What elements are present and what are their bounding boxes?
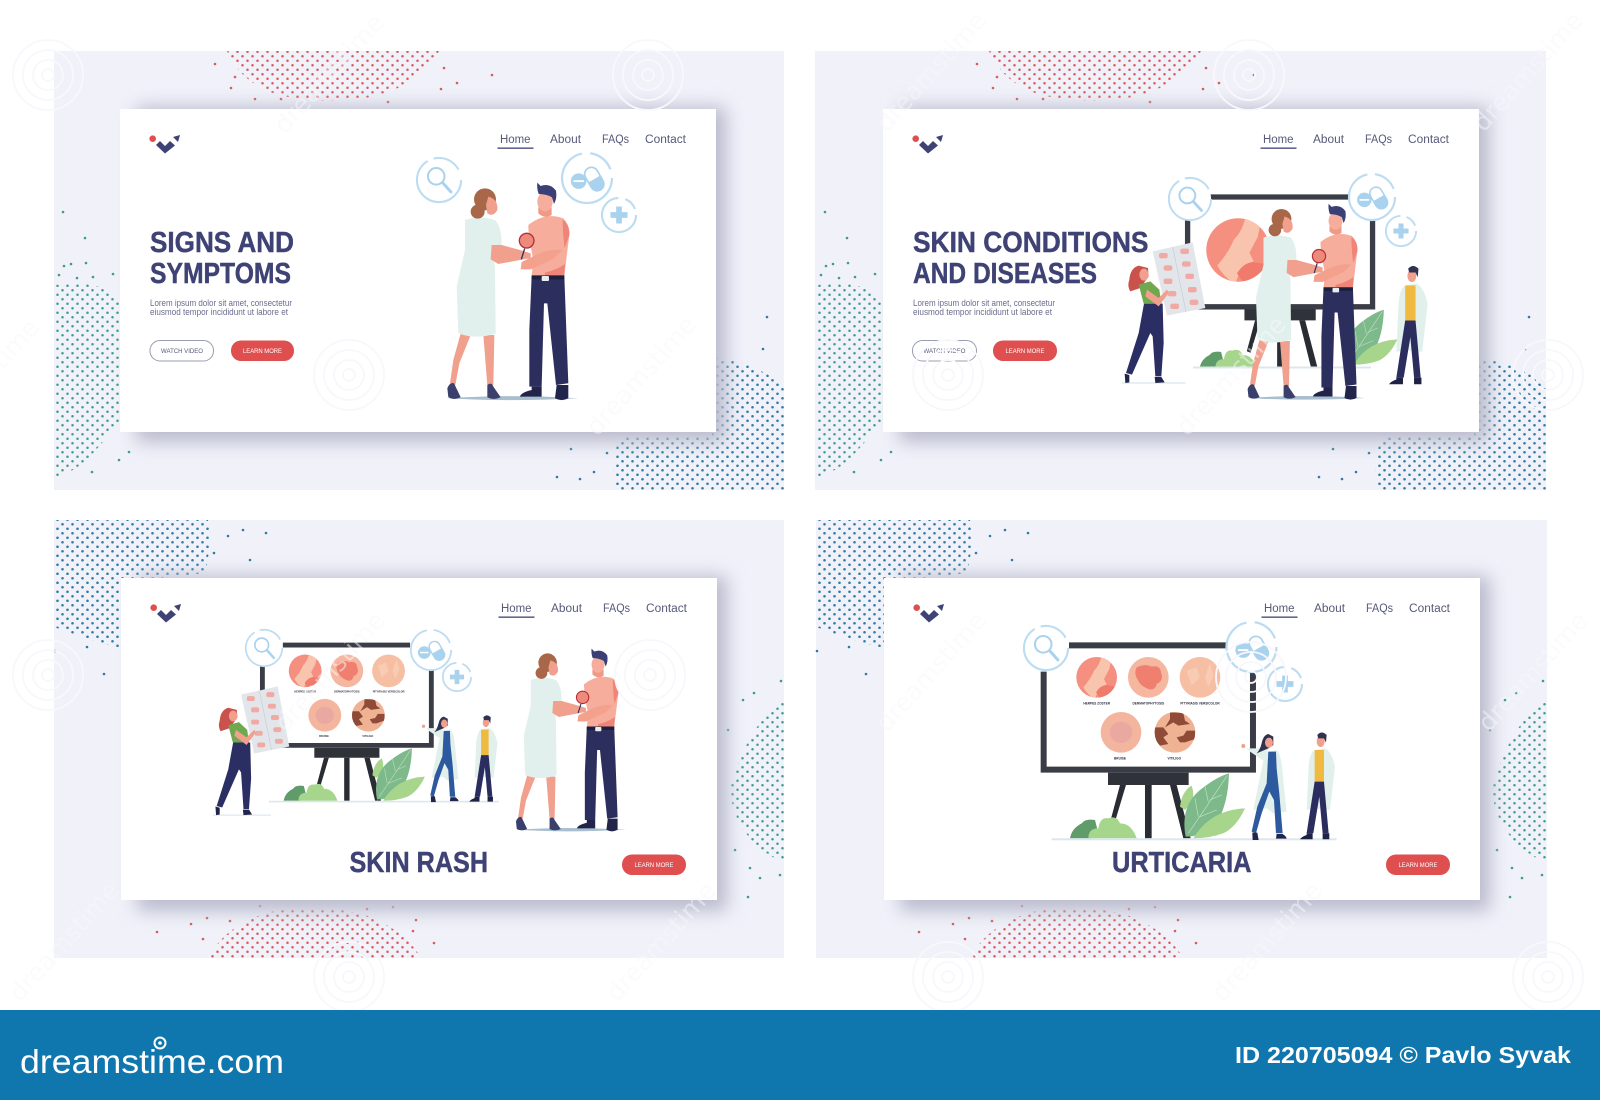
body text <box>150 298 292 317</box>
navigation: Home <box>1264 603 1294 615</box>
skin: herpes zoster <box>289 653 322 694</box>
plant: leaves <box>1342 310 1397 365</box>
skin: vitiligo: VITILIGO <box>1168 756 1182 760</box>
button: watch video <box>912 340 976 361</box>
button: learn more <box>622 854 686 875</box>
illustration: doctor examining patient <box>1247 204 1366 400</box>
body text: eiusmod tempor incididunt ut labore et <box>150 307 289 317</box>
navigation <box>498 134 687 149</box>
footer logo: dreamstime.com <box>20 1043 284 1080</box>
watermark text: dreamstime <box>870 606 992 737</box>
title <box>913 227 1148 290</box>
watermark text: dreamstime <box>1472 606 1594 737</box>
button: watch video: WATCH VIDEO <box>924 349 966 355</box>
navigation: Contact <box>1409 603 1451 615</box>
title: URTICARIA <box>1112 847 1252 879</box>
skin: pityriasis versicolor <box>1180 657 1220 705</box>
landing page card <box>120 109 716 432</box>
landing page card <box>884 578 1480 900</box>
character: woman with blister pack <box>1122 242 1205 384</box>
skin: pityriasis versicolor: PITYRIASIS VERSICOLOR <box>373 690 405 694</box>
icon: plus <box>602 198 636 232</box>
button: learn more: LEARN MORE <box>634 863 674 869</box>
character: male doctor <box>1389 266 1428 384</box>
card shadow <box>137 576 727 911</box>
navigation: FAQs <box>1366 603 1393 615</box>
navigation: FAQs <box>602 134 629 146</box>
title: AND DISEASES <box>913 258 1097 290</box>
icon: magnifier <box>1024 626 1068 670</box>
panel: signs and symptoms <box>54 51 784 490</box>
skin: bruise: BRUISE <box>1114 756 1126 760</box>
decorative dot clusters <box>816 520 1546 958</box>
poster with skin conditions and staff <box>1041 642 1337 840</box>
button: watch video <box>150 340 214 361</box>
navigation: FAQs <box>603 603 630 615</box>
icon: pills <box>562 153 612 203</box>
skin: pityriasis versicolor: PITYRIASIS VERSICOLOR <box>1180 701 1220 705</box>
title: SYMPTOMS <box>150 258 291 290</box>
character: female doctor <box>422 717 458 802</box>
body text <box>913 298 1055 317</box>
navigation: About <box>1314 603 1346 615</box>
skin: dermatophytosis <box>1128 657 1169 705</box>
icon: magnifier <box>246 630 282 666</box>
plant: bush <box>1200 350 1257 368</box>
card shadow <box>136 107 726 442</box>
illustration: poster with board <box>1185 194 1375 367</box>
skin: dermatophytosis: DERMATOPHYTOSIS <box>1133 701 1164 705</box>
navigation: Home <box>500 134 530 146</box>
skin: bruise <box>1101 712 1141 760</box>
title: SIGNS AND <box>150 227 294 259</box>
plant: leaves <box>1180 773 1245 838</box>
ground line <box>1193 366 1371 368</box>
skin: herpes zoster: HERPES ZOSTER <box>1083 701 1111 705</box>
icon: pills <box>1227 622 1276 672</box>
navigation: Contact <box>646 603 688 615</box>
panel: skin conditions and diseases <box>815 51 1546 490</box>
navigation: About <box>1313 134 1345 146</box>
logo <box>150 604 181 622</box>
watermark text: dreamstime <box>3 876 125 1007</box>
character: female doctor <box>1241 734 1287 840</box>
skin: herpes zoster: HERPES ZOSTER <box>294 690 316 694</box>
logo <box>912 135 943 154</box>
skin: dermatophytosis <box>330 654 363 694</box>
button: watch video: WATCH VIDEO <box>161 349 203 355</box>
watermark text: dreamstime <box>1467 6 1589 137</box>
body text: Lorem ipsum dolor sit amet, consectetur <box>913 298 1055 308</box>
navigation: About <box>550 134 582 146</box>
card shadow <box>900 576 1490 911</box>
watermark text: dreamstime <box>269 606 391 737</box>
landing page card <box>121 578 717 900</box>
watermark text: dreamstime <box>580 310 702 441</box>
icon: plus <box>443 663 471 691</box>
skin: vitiligo <box>1154 712 1195 760</box>
panel: skin rash <box>54 520 784 958</box>
navigation: Home <box>501 603 532 615</box>
skin: bruise: BRUISE <box>319 734 329 738</box>
decorative dot clusters <box>816 51 1546 490</box>
navigation: About <box>551 603 583 615</box>
icon: magnifier <box>417 158 461 202</box>
icon: plus <box>1268 667 1302 701</box>
skin: vitiligo <box>352 699 385 738</box>
poster skin circle <box>1206 216 1270 284</box>
watermark text: dreamstime <box>1206 876 1328 1007</box>
title <box>150 227 294 290</box>
button: learn more: LEARN MORE <box>243 349 282 355</box>
skin: herpes zoster <box>1076 656 1117 705</box>
ground line <box>1052 838 1337 840</box>
card shadow <box>899 107 1489 442</box>
button: learn more: LEARN MORE <box>1398 863 1438 869</box>
illustration: doctor examining patient <box>447 183 578 400</box>
watermark text: dreamstime <box>600 876 722 1007</box>
title: SKIN RASH <box>350 847 488 879</box>
navigation <box>1260 134 1450 149</box>
poster with skin conditions and staff <box>260 643 499 802</box>
landing page card <box>883 109 1479 432</box>
plant: bush <box>1070 817 1137 838</box>
skin: dermatophytosis: DERMATOPHYTOSIS <box>334 690 360 694</box>
skin: vitiligo: VITILIGO <box>362 734 373 738</box>
plant: leaves <box>372 748 425 801</box>
character: male doctor <box>1300 732 1335 839</box>
logo <box>149 135 180 154</box>
navigation <box>498 603 688 618</box>
image id and credit: ID 220705094 © Pavlo Syvak <box>1235 1042 1571 1068</box>
watermark text: dreamstime <box>268 8 390 139</box>
button: learn more: LEARN MORE <box>1006 349 1044 355</box>
body text: eiusmod tempor incididunt ut labore et <box>913 307 1053 317</box>
icon: plus <box>1386 216 1416 246</box>
icon: pills <box>411 630 451 670</box>
icon: pills <box>1349 174 1395 220</box>
watermark text: dreamstime <box>1170 310 1292 441</box>
navigation: Contact <box>1408 134 1450 146</box>
decorative dot clusters <box>54 520 784 958</box>
navigation <box>1262 603 1451 618</box>
navigation: Home <box>1263 134 1294 146</box>
character: male doctor <box>469 715 498 802</box>
body text: Lorem ipsum dolor sit amet, consectetur <box>150 298 292 308</box>
button: learn more <box>1386 854 1450 875</box>
button: learn more <box>993 340 1057 361</box>
logo <box>913 604 944 622</box>
illustration: doctor examining patient <box>515 649 626 831</box>
plant: bush <box>284 784 337 801</box>
footer bar <box>0 1010 1600 1100</box>
decorative dot clusters <box>54 51 784 490</box>
title: SKIN CONDITIONS <box>913 227 1148 259</box>
ground line <box>269 801 499 802</box>
skin: pityriasis versicolor <box>372 654 405 694</box>
icon: magnifier <box>1169 178 1211 220</box>
navigation: Contact <box>645 134 687 146</box>
character: woman with blister pack <box>213 686 289 816</box>
navigation: FAQs <box>1365 134 1392 146</box>
skin: bruise <box>308 699 341 738</box>
button: learn more <box>231 340 294 361</box>
watermark text: dreamstime <box>870 6 992 137</box>
panel: urticaria <box>816 520 1547 958</box>
